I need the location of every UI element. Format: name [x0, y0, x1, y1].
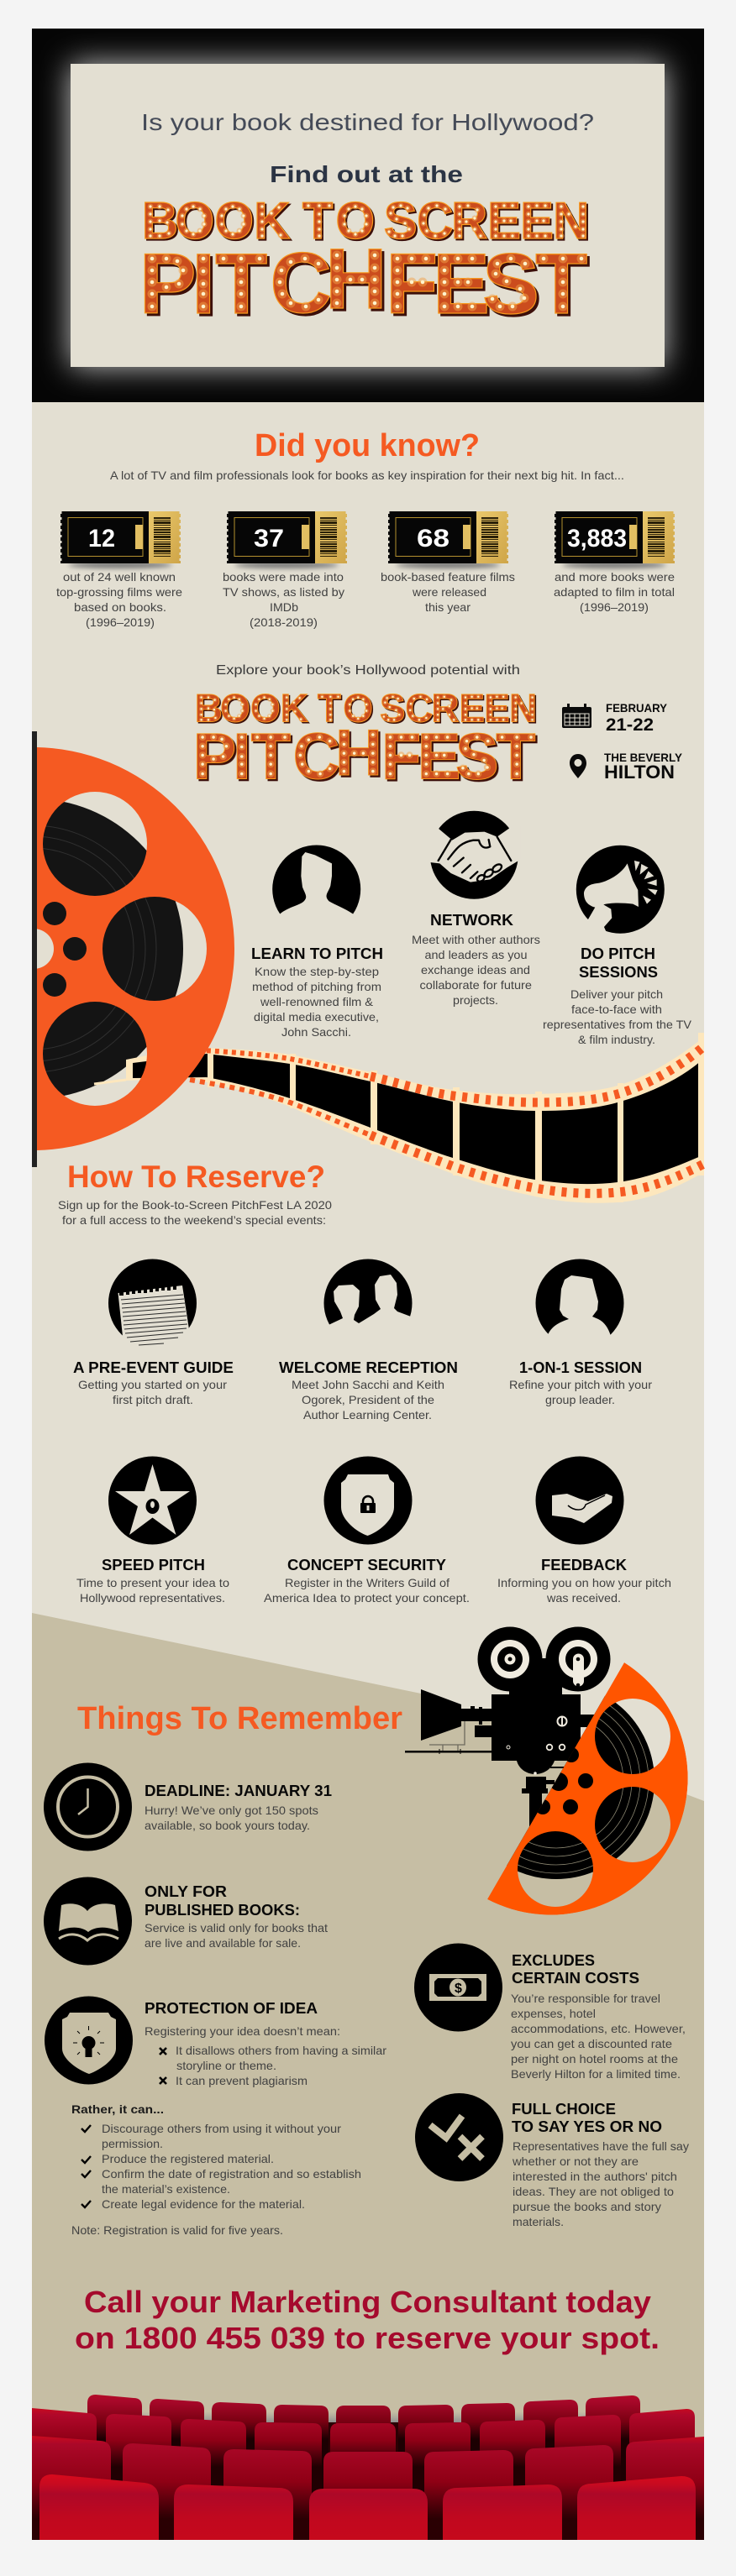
call to action: on 1800 455 039 to reserve your spot. [75, 2321, 660, 2355]
reminder: protection of idea: Note: Registration is valid for five years. [71, 2223, 283, 2237]
reminder: published books: Service is valid only for books that [145, 1921, 328, 1935]
feature: network: exchange ideas and [421, 963, 530, 976]
reminder: protection of idea: It disallows others from having a similar [176, 2044, 386, 2057]
feature: network: Meet with other authors [412, 933, 540, 946]
content background [32, 402, 704, 2540]
event: feedback: was received. [546, 1591, 621, 1605]
reserve intro: for a full access to the weekend’s special events: [62, 1213, 326, 1227]
event: pre-event guide [73, 1259, 234, 1406]
hero question: Is your book destined for Hollywood? [141, 109, 594, 135]
date text: FEBRUARY [606, 701, 668, 715]
event: concept security [264, 1456, 470, 1605]
event: speed pitch: Time to present your idea to [76, 1576, 229, 1589]
feature: learn to pitch: well-renowned film & [260, 995, 374, 1008]
reminder: full choice [415, 2093, 689, 2228]
icon: open book [44, 1877, 132, 1965]
event: concept security: America Idea to protect your concept. [264, 1591, 470, 1605]
illustration: film camera [405, 1627, 610, 1835]
film strip [94, 1033, 704, 1203]
feature: learn to pitch: method of pitching from [252, 980, 381, 993]
call to action: Call your Marketing Consultant today [84, 2285, 651, 2319]
event: feedback: FEEDBACK [541, 1557, 627, 1573]
stat caption 12: out of 24 well known [63, 570, 176, 584]
event: speed pitch [76, 1456, 229, 1605]
reminder: full choice: FULL CHOICE [512, 2101, 616, 2118]
reminder: excludes costs: accommodations, etc. However, [511, 2022, 686, 2035]
icon: two people [319, 1259, 417, 1352]
icon: clock [44, 1763, 132, 1851]
stat caption 12: top-grossing films were [56, 585, 182, 599]
film reel with strip [0, 731, 704, 1203]
reminder: published books: PUBLISHED BOOKS: [145, 1902, 300, 1919]
feature: learn to pitch: John Sacchi. [281, 1025, 351, 1039]
event: welcome reception [279, 1259, 458, 1422]
reminder: protection of idea: Confirm the date of registration and so establish [102, 2167, 361, 2181]
feature: do pitch sessions: DO PITCH [581, 945, 655, 962]
reminder: excludes costs: CERTAIN COSTS [512, 1970, 639, 1987]
stat: ticket 37 [227, 511, 347, 568]
stat caption 3,883: (1996–2019) [580, 600, 649, 614]
feature: do pitch sessions: representatives from the TV [543, 1018, 692, 1031]
event: pre-event guide: Getting you started on your [78, 1378, 227, 1391]
icon: dollar bill: $ [455, 1982, 462, 1996]
event: one-on-one session: group leader. [545, 1393, 615, 1406]
hero lead-in: Find out at the [270, 161, 463, 187]
reminder: excludes costs: Beverly Hilton for a limited time. [511, 2067, 681, 2081]
feature: learn to pitch: Know the step-by-step [255, 965, 379, 978]
feature: learn to pitch [251, 845, 383, 1039]
stat caption 37: books were made into [223, 570, 344, 584]
illustration: cinema seats [32, 2395, 704, 2540]
reminder: excludes costs: expenses, hotel [511, 2007, 596, 2020]
venue text: THE BEVERLY [604, 751, 683, 764]
reminder: full choice: Representatives have the full say [513, 2139, 689, 2153]
call to action [75, 2285, 660, 2355]
reminder: protection of idea: It can prevent plagiarism [176, 2074, 308, 2087]
feature: do pitch sessions: face-to-face with [571, 1003, 662, 1016]
illustration: half film reel [487, 1662, 688, 1915]
reserve intro: Sign up for the Book-to-Screen PitchFest LA 2020 [58, 1198, 332, 1212]
stat caption 12: (1996–2019) [86, 615, 155, 629]
stat: ticket 3,883 [555, 511, 675, 568]
reminder: deadline: DEADLINE: JANUARY 31 [145, 1783, 332, 1799]
reminder: excludes costs: You’re responsible for travel [511, 1992, 660, 2005]
event: one-on-one session: 1-ON-1 SESSION [519, 1359, 642, 1376]
reminder: full choice: interested in the authors' pitch [513, 2170, 677, 2183]
icon: calendar [562, 704, 591, 728]
marquee logo: BOOK TO SCREEN [142, 191, 589, 249]
event: speed pitch: Hollywood representatives. [80, 1591, 225, 1605]
feature: learn to pitch: digital media executive, [254, 1010, 379, 1024]
reminder: excludes costs: you can get a discounted rate [511, 2037, 672, 2050]
panel: hero [32, 29, 704, 402]
feature: network [412, 811, 540, 1007]
reminder: published books [44, 1877, 328, 1965]
event: concept security: Register in the Writers Guild of [285, 1576, 449, 1589]
feature: learn to pitch: LEARN TO PITCH [251, 945, 383, 962]
icon: woman silhouette [534, 1259, 630, 1352]
reminder: protection of idea: permission. [102, 2137, 163, 2150]
stat caption 68: book-based feature films [381, 570, 515, 584]
reminder: deadline: Hurry! We’ve only got 150 spots [145, 1804, 318, 1817]
event: pre-event guide: A PRE-EVENT GUIDE [73, 1359, 234, 1376]
event: welcome reception: Ogorek, President of the [302, 1393, 434, 1406]
icon: location pin [570, 754, 586, 778]
panel: dark tan lower section [32, 1613, 704, 2540]
reminder: deadline: available, so book yours today. [145, 1819, 310, 1832]
reminder: published books: ONLY FOR [145, 1883, 227, 1900]
venue text: HILTON [604, 762, 675, 783]
stat caption 68: were released [412, 585, 486, 599]
intro sentence: A lot of TV and film professionals look for books as key inspiration for their next big hit. In fact... [110, 469, 624, 482]
reminder: full choice: whether or not they are [512, 2155, 639, 2168]
event: pre-event guide: first pitch draft. [113, 1393, 193, 1406]
icon: shield lock [324, 1456, 412, 1545]
reminder: full choice: materials. [513, 2215, 564, 2228]
reminder: protection of idea: Registering your idea doesn’t mean: [145, 2024, 340, 2038]
marquee logo small: PITCHFEST [192, 715, 536, 793]
stat: ticket 68 [388, 511, 508, 568]
stat caption 37 [223, 570, 344, 629]
feature: do pitch sessions: Deliver your pitch [570, 987, 663, 1001]
feature: do pitch sessions [543, 846, 692, 1046]
stat caption 37: TV shows, as listed by [223, 585, 344, 599]
reminder: protection of idea: Create legal evidence for the material. [102, 2197, 305, 2211]
stat caption 3,883: and more books were [555, 570, 675, 584]
stat: ticket 3,883: 3,883 [567, 525, 627, 552]
feature: do pitch sessions: SESSIONS [579, 964, 658, 981]
reminder: protection of idea: Discourage others from using it without your [102, 2122, 341, 2135]
reel disc orange [37, 747, 234, 1150]
reminder: protection of idea: Rather, it can... [71, 2102, 164, 2116]
event: welcome reception: Meet John Sacchi and Keith [292, 1378, 444, 1391]
icon: notepad [108, 1259, 197, 1352]
stat caption 12: based on books. [74, 600, 166, 614]
reminder: excludes costs: per night on hotel rooms at the [511, 2052, 678, 2066]
reminder: deadline [44, 1763, 332, 1851]
heading: how to reserve: How To Reserve? [67, 1160, 325, 1194]
event: welcome reception: WELCOME RECEPTION [279, 1359, 458, 1376]
feature: network: and leaders as you [425, 948, 528, 961]
reminder: full choice: ideas. They are not obliged to [513, 2185, 674, 2198]
date text [606, 701, 668, 735]
explore line: Explore your book’s Hollywood potential with [216, 663, 520, 678]
seat row 3 [32, 2436, 704, 2540]
reminder: protection of idea [45, 1997, 386, 2237]
reminder: full choice: pursue the books and story [513, 2200, 661, 2213]
event: one-on-one session: Refine your pitch with your [509, 1378, 652, 1391]
heading: did you know: Did you know? [255, 428, 480, 463]
stat caption 37: IMDb [270, 600, 298, 614]
icon: open hand [536, 1456, 623, 1545]
reminder: protection of idea: the material’s existence. [102, 2182, 230, 2196]
event: feedback [497, 1456, 671, 1605]
icon: handshake [426, 811, 521, 899]
event: speed pitch: SPEED PITCH [102, 1557, 205, 1573]
reminder: published books: are live and available for sale. [145, 1936, 301, 1950]
seat row 1 [87, 2395, 640, 2540]
stat caption 12 [56, 570, 182, 629]
reminder: protection of idea: Produce the registered material. [102, 2152, 274, 2165]
feature: do pitch sessions: & film industry. [578, 1033, 655, 1046]
icon: shield with bulb [45, 1997, 133, 2084]
feature: network: collaborate for future [420, 978, 532, 992]
feature: network: NETWORK [430, 912, 513, 929]
event: concept security: CONCEPT SECURITY [287, 1557, 446, 1573]
feature: network: projects. [453, 993, 498, 1007]
stat caption 3,883: adapted to film in total [554, 585, 675, 599]
stat caption 3,883 [554, 570, 675, 614]
reel side bar [32, 731, 37, 1167]
icon: man silhouette [269, 845, 365, 940]
seat row 4 [39, 2474, 696, 2540]
marquee logo: PITCHFEST [139, 231, 587, 332]
reminder: protection of idea: storyline or theme. [176, 2059, 276, 2072]
icon: check and cross [415, 2093, 503, 2181]
icon: walk of fame star [108, 1456, 197, 1545]
stat: ticket 37: 37 [254, 525, 284, 552]
marquee logo small: BOOK TO SCREEN [195, 686, 537, 730]
reminder: excludes costs: EXCLUDES [512, 1952, 595, 1969]
reminder: protection of idea: PROTECTION OF IDEA [145, 2000, 318, 2017]
event: feedback: Informing you on how your pitch [497, 1576, 671, 1589]
icon: megaphone [576, 846, 665, 939]
cross marks [160, 2048, 166, 2084]
reserve intro [58, 1198, 332, 1227]
heading: things to remember: Things To Remember [77, 1701, 402, 1736]
date text: 21-22 [606, 715, 654, 735]
stat caption 68 [381, 570, 515, 614]
reminder: full choice: TO SAY YES OR NO [512, 2118, 662, 2135]
venue text [604, 751, 683, 783]
event: welcome reception: Author Learning Center. [303, 1408, 432, 1422]
stat: ticket 12 [60, 511, 181, 568]
seat row 2 [32, 2408, 695, 2540]
stat: ticket 68: 68 [417, 525, 449, 552]
reel film disc [43, 802, 183, 1096]
reminder: excludes costs [414, 1943, 686, 2081]
event: one-on-one session [509, 1259, 652, 1406]
stat caption 68: this year [425, 600, 471, 614]
icon: dollar bill [414, 1943, 502, 2032]
stat: ticket 12: 12 [88, 525, 115, 552]
stat caption 37: (2018-2019) [250, 615, 318, 629]
check marks [81, 2125, 91, 2207]
